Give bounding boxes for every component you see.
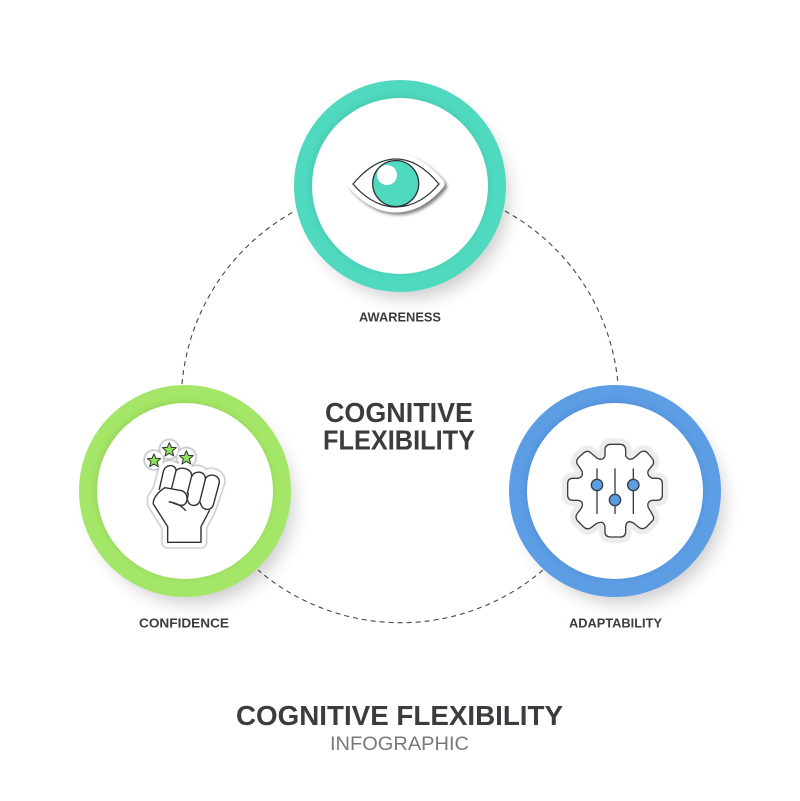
label: confidence: CONFIDENCE [139, 616, 229, 630]
central heading: FLEXIBILITY [323, 424, 475, 456]
title: COGNITIVE FLEXIBILITY [236, 700, 563, 731]
ring centre [312, 98, 488, 274]
dashed connector: awareness to adaptability [505, 211, 618, 384]
central heading [323, 397, 475, 456]
teal ring [294, 80, 506, 292]
ring centre [527, 403, 703, 579]
ring shadow [93, 403, 293, 603]
ring inner shade [525, 401, 703, 579]
green ring [79, 385, 291, 597]
ring inner shade [95, 401, 273, 579]
subtitle: INFOGRAPHIC [330, 733, 469, 755]
ring inner shade [310, 96, 488, 274]
blue ring [509, 385, 721, 597]
panel: confidence [79, 385, 293, 630]
panel: awareness [294, 80, 508, 324]
icon: gear with sliders [568, 444, 662, 537]
central heading: COGNITIVE [325, 397, 473, 428]
icon: fist with stars [143, 439, 219, 542]
ring shadow [308, 98, 508, 298]
icon: eye [353, 159, 442, 210]
ring shadow [523, 403, 723, 603]
dashed connector: confidence to awareness [182, 211, 295, 384]
dashed connector: adaptability to confidence [258, 570, 543, 623]
label: awareness: AWARENESS [359, 310, 441, 324]
ring centre [97, 403, 273, 579]
label: adaptability: ADAPTABILITY [569, 616, 662, 630]
panel: adaptability [509, 385, 723, 630]
